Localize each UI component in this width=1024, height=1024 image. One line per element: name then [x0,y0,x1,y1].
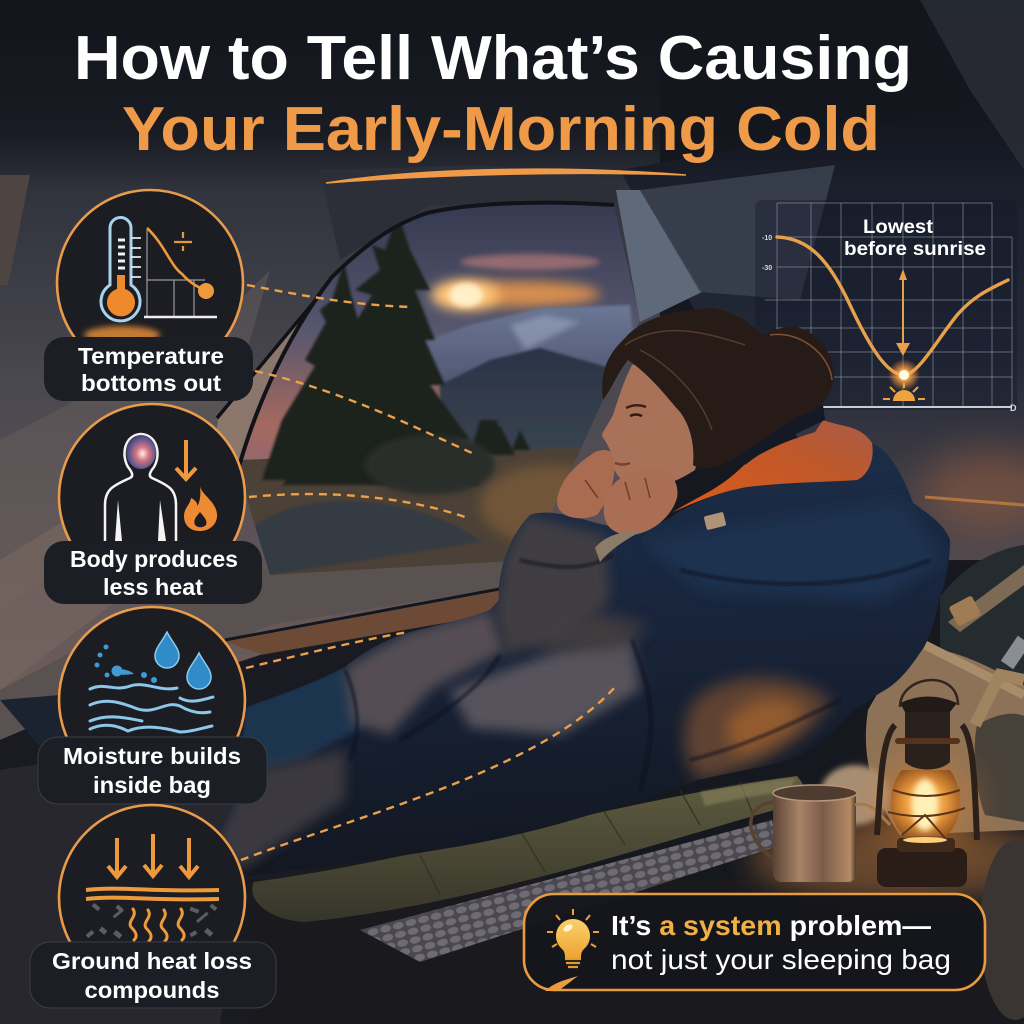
pine trees [262,213,530,485]
callout text [611,910,951,975]
panel: body produces less heat: less heat [103,574,203,600]
callout text: It’s a system problem— [611,910,931,941]
arrow: double-headed to minimum [896,269,910,356]
title: How to Tell What’s Causing [74,24,912,93]
axis ticks: D [1010,403,1017,413]
icon: thermometer with falling curve [101,218,217,321]
chart label: before sunrise [844,239,986,260]
panel: ground heat loss compounds: compounds [84,977,220,1003]
icon: rising sun [883,383,925,401]
title [74,24,912,183]
orange hood lining [673,420,873,512]
callout tail swoosh [545,976,578,991]
hair highlights [625,331,832,430]
panel: body produces less heat [44,404,262,604]
axis ticks [762,235,1017,413]
icon: down arrow [176,440,196,479]
mug [751,785,857,882]
panel: temperature bottoms out: Temperature [78,343,224,369]
chart label: Lowest [863,217,934,238]
chart: temperature curve, lowest before sunrise [755,200,1017,413]
callout text: not just your sleeping bag [611,944,951,975]
lantern [855,680,977,887]
axis ticks: -10 [762,235,772,242]
woman in sleeping bag [215,308,1024,962]
bag logo tag [704,512,726,530]
face [602,364,699,486]
chart label [844,217,986,260]
sheen patches on the bag fabric [215,500,945,870]
tent door seam arc [238,203,614,470]
panel: moisture builds inside bag [38,607,267,804]
panel: ground heat loss compounds: Ground heat loss [52,948,252,974]
icon: flame [184,486,217,531]
panel: temperature bottoms out [44,190,253,401]
axis ticks: -30 [762,265,772,272]
callout: system problem [524,894,985,991]
panel: body produces less heat: Body produces [70,546,238,572]
icon: body outline [105,434,176,541]
title: Your Early-Morning Cold [122,95,880,164]
icon: water drops and waves [90,632,213,732]
tent window: sunset view [230,195,650,580]
dark collar [740,405,825,465]
facial details [615,405,646,464]
olive sleeping pad [252,776,805,922]
backpack [820,545,1024,835]
title underline swoosh [326,169,686,183]
hair [602,308,834,468]
panel: temperature bottoms out: bottoms out [81,370,221,396]
sleeping bag body [215,443,950,877]
foam pad [360,820,778,962]
panel: ground heat loss compounds [30,805,276,1008]
panel: moisture builds inside bag: inside bag [93,772,211,798]
icon: light bulb [547,909,599,967]
icon: arrows, ground layers, rising heat [86,834,219,941]
panel: moisture builds inside bag: Moisture builds [63,743,241,769]
hands [557,450,677,562]
sunrise glow marker [888,359,920,391]
dashed connector lines [241,285,615,860]
